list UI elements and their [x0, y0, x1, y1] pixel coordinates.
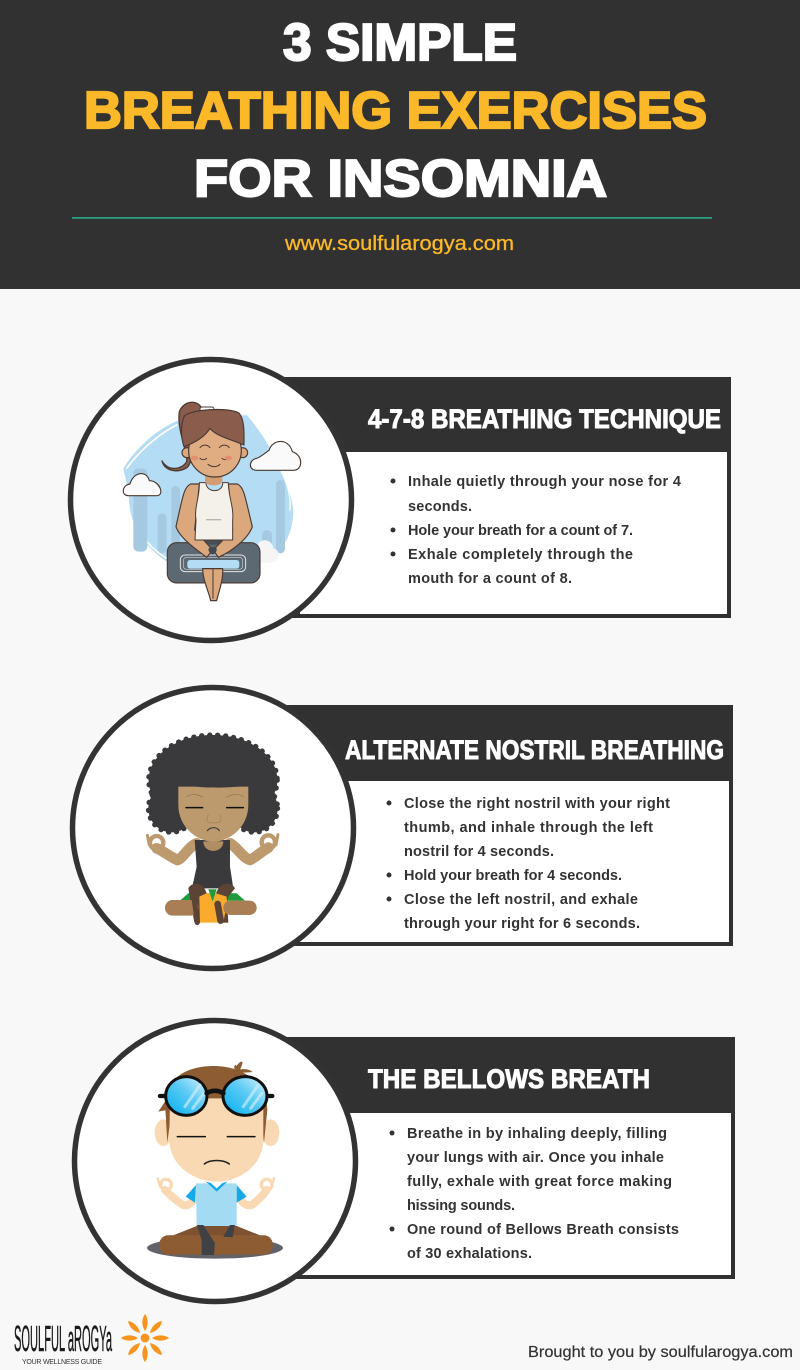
arms and hands [165, 1190, 197, 1205]
bullet list: nostril for 4 seconds. [404, 844, 554, 860]
arms [157, 843, 197, 860]
bullet list: Hole your breath for a count of 7. [408, 523, 633, 539]
ears [155, 1119, 172, 1146]
cushion [167, 543, 260, 583]
icon: man with glasses [147, 1062, 283, 1259]
legs over cushion [203, 569, 223, 601]
heading: ALTERNATE NOSTRIL BREATHING [345, 735, 724, 765]
website url: www.soulfularogya.com [284, 233, 514, 255]
feet and shins [188, 884, 207, 923]
face [200, 445, 229, 467]
bullet list: your lungs with air. Once you inhale [407, 1150, 664, 1166]
bullet list: seconds. [408, 499, 472, 515]
cloud left [123, 474, 161, 496]
heading: 4-7-8 BREATHING TECHNIQUE [368, 404, 721, 434]
footer credit: Brought to you by soulfularogya.com [528, 1344, 793, 1361]
bullet list [390, 474, 681, 587]
neck, ears, head [205, 470, 222, 485]
tank top [192, 840, 233, 888]
hair [148, 735, 278, 832]
bullet list: One round of Bellows Breath consists [407, 1222, 679, 1238]
bullet list: Close the right nostril with your right [404, 796, 670, 812]
title: FOR INSOMNIA [194, 150, 607, 208]
heading: THE BELLOWS BREATH [368, 1064, 650, 1094]
panel: 4-7-8 breathing technique [285, 377, 731, 618]
bullet list: thumb, and inhale through the left [404, 820, 653, 836]
text: SOULFUL aROGYa [14, 1318, 112, 1359]
shirt [186, 1185, 247, 1203]
cloud right [250, 441, 301, 470]
bullet list: Inhale quietly through your nose for 4 [408, 474, 681, 490]
face [178, 787, 248, 842]
hair [181, 410, 244, 447]
cloud low [258, 540, 279, 563]
ponytail [162, 402, 202, 471]
bullet list [390, 1126, 679, 1262]
bullet list: through your right for 6 seconds. [404, 916, 640, 932]
panel: alternate nostril breathing [285, 705, 733, 946]
circle: man with afro meditating [72, 688, 354, 968]
icon: man with afro [147, 735, 278, 923]
title: BREATHING EXERCISES [84, 82, 707, 140]
logo: soulful arogya [14, 1314, 169, 1366]
circle: woman meditating [70, 360, 352, 640]
legs [170, 1226, 263, 1237]
bullet list: of 30 exhalations. [407, 1246, 532, 1262]
circle: man with glasses meditating [74, 1020, 356, 1302]
icon: orange flower [121, 1314, 169, 1362]
hair [165, 1066, 267, 1143]
glasses [160, 1089, 272, 1102]
bullet list: mouth for a count of 8. [408, 571, 572, 587]
title: 3 SIMPLE [283, 14, 517, 72]
tank top and arms [199, 537, 228, 545]
hands [150, 836, 163, 849]
thighs [165, 900, 198, 916]
legs base [180, 893, 245, 901]
logo tagline: YOUR WELLNESS GUIDE [22, 1359, 102, 1366]
face [169, 1098, 263, 1182]
bullet list: Breathe in by inhaling deeply, filling [407, 1126, 667, 1142]
shadow [147, 1237, 283, 1259]
bullet list: Hold your breath for 4 seconds. [404, 868, 622, 884]
icon: woman meditating [123, 402, 301, 601]
bullet list: hissing sounds. [407, 1198, 515, 1214]
bullet list: Exhale completely through the [408, 547, 633, 563]
title [84, 14, 707, 208]
panel: the bellows breath [285, 1037, 735, 1279]
bullet list: Close the left nostril, and exhale [404, 892, 638, 908]
heart hands [209, 547, 217, 555]
header banner [0, 0, 800, 289]
bullet list: fully, exhale with great force making [407, 1174, 672, 1190]
bullet list [386, 796, 670, 932]
